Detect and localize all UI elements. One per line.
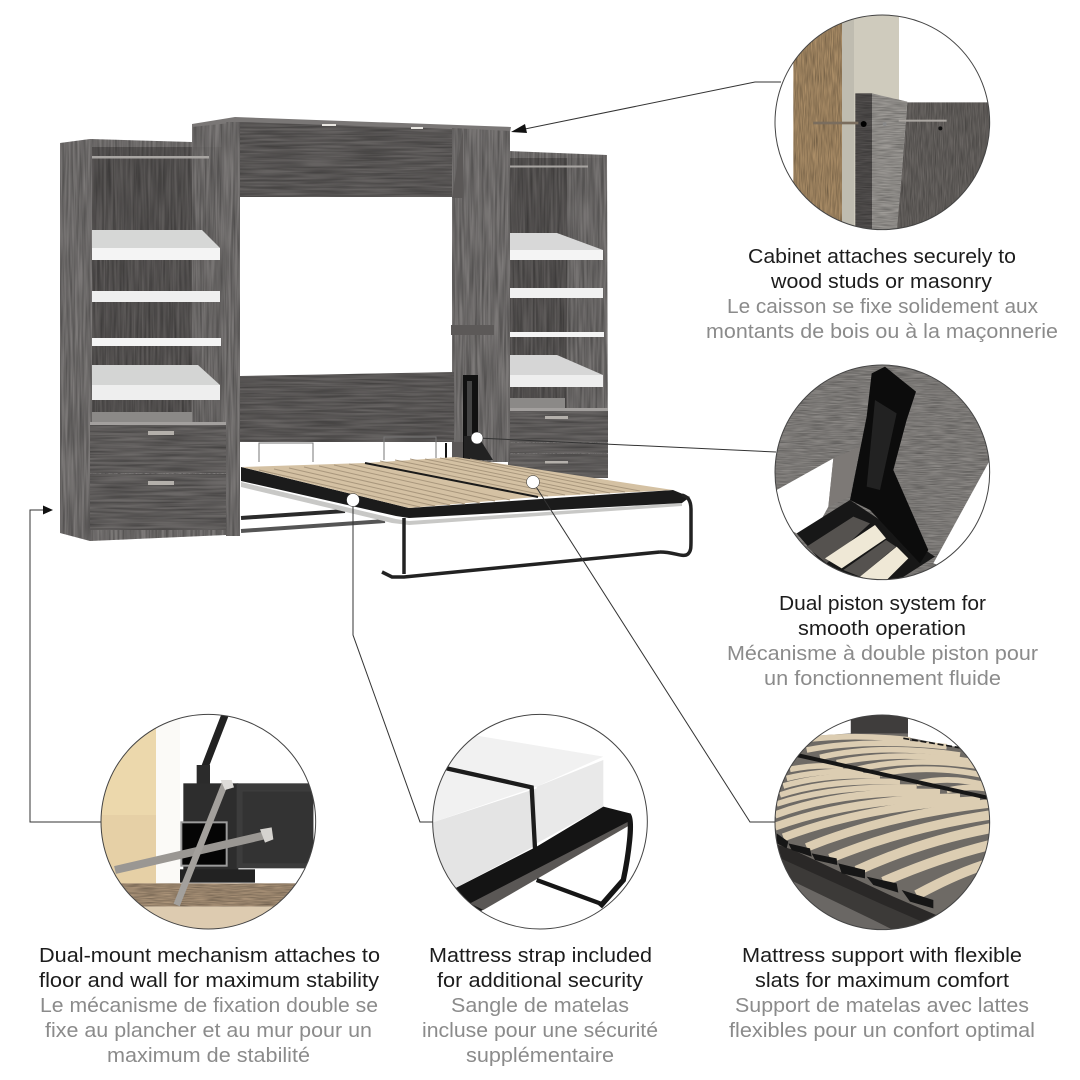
left storage tower (60, 139, 226, 541)
leader: piston callout (477, 438, 776, 452)
caption: flexible slats: Support de matelas avec lattes (735, 995, 1029, 1017)
floor support bars (241, 511, 385, 531)
caption: dual-mount mechanism: maximum de stabilité (107, 1045, 310, 1067)
central cabinet (192, 117, 511, 536)
detail circle: dual piston (773, 360, 993, 583)
caption: mattress strap (422, 945, 658, 1067)
bed frame (241, 467, 690, 525)
caption: dual piston: Mécanisme à double piston pour (727, 643, 1038, 665)
caption: cabinet attachment: Cabinet attaches securely to (748, 246, 1016, 268)
detail circle: mattress strap (430, 713, 653, 933)
caption: mattress strap: Mattress strap included (429, 945, 652, 967)
leader lines and arrows (30, 82, 781, 822)
caption: dual piston: smooth operation (798, 618, 966, 640)
bed legs (382, 495, 691, 577)
leader: slats callout (533, 482, 776, 822)
caption: dual-mount mechanism: floor and wall for maximum stability (39, 970, 379, 992)
caption: dual piston (727, 593, 1038, 690)
caption: cabinet attachment: montants de bois ou à la maçonnerie (706, 321, 1058, 343)
caption: dual-mount mechanism: Dual-mount mechanism attaches to (39, 945, 380, 967)
caption: mattress strap: supplémentaire (466, 1045, 614, 1067)
caption: dual-mount mechanism: Le mécanisme de fixation double se (40, 995, 378, 1017)
caption: dual-mount mechanism (39, 945, 380, 1067)
detail circle: flexible slats (770, 713, 993, 933)
callout markers (346, 432, 540, 506)
caption: mattress strap: for additional security (437, 970, 643, 992)
caption: mattress strap: Sangle de matelas (451, 995, 629, 1017)
caption: mattress strap: incluse pour une sécurité (422, 1020, 658, 1042)
caption: cabinet attachment (706, 246, 1058, 343)
wooden slats (242, 457, 673, 508)
caption: cabinet attachment: Le caisson se fixe solidement aux (727, 296, 1038, 318)
detail circle: cabinet attachment (773, 13, 993, 233)
right storage tower (508, 151, 608, 478)
caption: dual piston: Dual piston system for (779, 593, 986, 615)
murphy bed with storage towers (60, 117, 691, 577)
leader: mattress strap callout (353, 500, 433, 822)
caption: cabinet attachment: wood studs or masonry (770, 271, 992, 293)
arrow: cabinet attachment callout (511, 82, 781, 133)
caption: dual-mount mechanism: fixe au plancher et au mur pour un (45, 1020, 372, 1042)
caption: flexible slats (729, 945, 1035, 1042)
piston mechanism (463, 375, 493, 460)
caption: dual piston: un fonctionnement fluide (764, 668, 1001, 690)
detail circle: dual-mount mechanism (100, 713, 323, 933)
caption: flexible slats: flexibles pour un confort optimal (729, 1020, 1035, 1042)
arrow: dual-mount callout (30, 506, 101, 822)
caption: flexible slats: slats for maximum comfort (755, 970, 1009, 992)
wall brackets (259, 437, 447, 462)
caption: flexible slats: Mattress support with flexible (742, 945, 1022, 967)
